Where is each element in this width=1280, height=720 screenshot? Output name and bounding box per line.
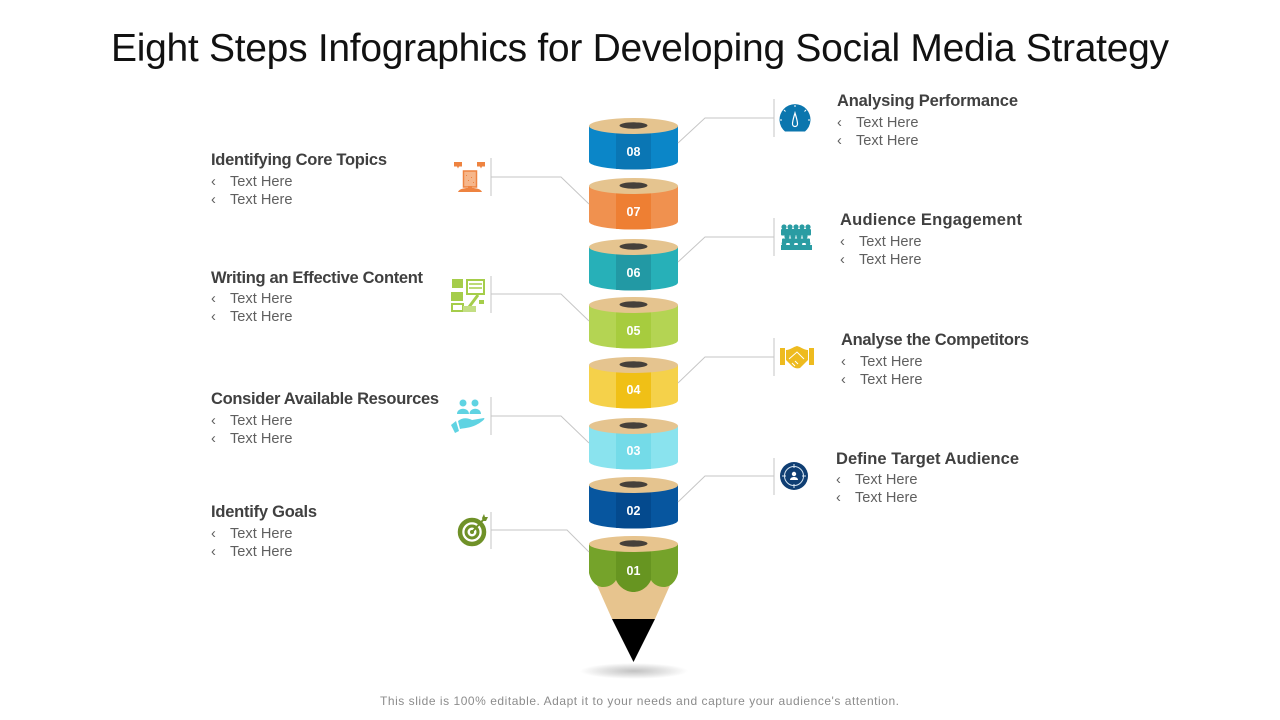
- segment 08: [589, 118, 678, 170]
- bullets: Text Here: [230, 291, 292, 307]
- heading: Define Target Audience: [836, 450, 1019, 468]
- bullets: [840, 234, 921, 268]
- bullets: ‹: [841, 354, 846, 370]
- icon: content: [451, 279, 484, 312]
- heading: Identifying Core Topics: [211, 151, 387, 169]
- segment 05: [589, 297, 678, 348]
- heading: Audience Engagement: [840, 211, 1022, 229]
- bullets: Text Here: [860, 354, 922, 370]
- bullets: ‹: [836, 490, 841, 506]
- bullets: Text Here: [230, 192, 292, 208]
- bullets: ‹: [211, 309, 216, 325]
- bullets: Text Here: [230, 309, 292, 325]
- bullets: [841, 354, 922, 388]
- icon: gauge: [779, 104, 810, 132]
- connector 06: [678, 218, 774, 262]
- icon: presentation: [454, 162, 485, 192]
- segment 01: [589, 536, 678, 592]
- connector 01: [491, 512, 589, 552]
- bullets: ‹: [211, 544, 216, 560]
- footer note: This slide is 100% editable. Adapt it to your needs and capture your audience's attention.: [380, 694, 899, 708]
- connector 02: [678, 458, 774, 502]
- heading: Consider Available Resources: [211, 390, 439, 408]
- segment 07: [589, 178, 678, 230]
- bullets: Text Here: [856, 133, 918, 149]
- bullets: ‹: [837, 115, 842, 131]
- bullets: ‹: [211, 526, 216, 542]
- step 03: Consider Available Resources: [211, 390, 589, 447]
- step 08: Analysing Performance: [678, 92, 1018, 149]
- bullets: Text Here: [230, 174, 292, 190]
- pencil shadow: [580, 663, 688, 679]
- bullets: [211, 174, 292, 208]
- bullets: Text Here: [855, 490, 917, 506]
- segment 03: 03: [627, 444, 640, 458]
- segment 03: [589, 418, 678, 470]
- heading: Identify Goals: [211, 503, 317, 521]
- bullets: ‹: [840, 252, 845, 268]
- heading: Analysing Performance: [837, 92, 1018, 110]
- icon: handshake: [780, 346, 814, 368]
- icon: target audience: [780, 462, 808, 490]
- segment 07: 07: [627, 205, 640, 219]
- heading: Analyse the Competitors: [841, 331, 1029, 349]
- bullets: ‹: [211, 174, 216, 190]
- step 07: Identifying Core Topics: [211, 151, 589, 208]
- step 01: Identify Goals: [211, 503, 589, 560]
- bullets: Text Here: [859, 252, 921, 268]
- bullets: [211, 413, 292, 447]
- pencil wood cone: [592, 574, 675, 619]
- segment 05: 05: [627, 324, 640, 338]
- icon: audience: [781, 224, 812, 250]
- step 06: Audience Engagement: [678, 211, 1022, 268]
- bullets: [211, 526, 292, 560]
- connector 04: [678, 338, 774, 383]
- title: Eight Steps Infographics for Developing Social Media Strategy: [111, 27, 1170, 70]
- bullets: [836, 472, 917, 506]
- bullets: Text Here: [230, 526, 292, 542]
- bullets: ‹: [211, 192, 216, 208]
- connector 03: [491, 397, 589, 443]
- connector 05: [491, 276, 589, 321]
- segment 06: [589, 239, 678, 290]
- bullets: Text Here: [855, 472, 917, 488]
- pencil: [580, 118, 688, 679]
- connector 08: [678, 99, 774, 143]
- bullets: Text Here: [230, 413, 292, 429]
- bullets: [837, 115, 918, 149]
- segment 06: 06: [627, 266, 640, 280]
- icon: bullseye: [460, 514, 488, 544]
- step 05: Writing an Effective Content: [211, 269, 589, 325]
- bullets: Text Here: [860, 372, 922, 388]
- segment 04: 04: [627, 383, 640, 397]
- bullets: ‹: [211, 413, 216, 429]
- segment 04: [589, 357, 678, 408]
- bullets: Text Here: [230, 544, 292, 560]
- heading: Writing an Effective Content: [211, 269, 424, 287]
- segment 01: 01: [627, 564, 640, 578]
- bullets: ‹: [211, 291, 216, 307]
- bullets: Text Here: [859, 234, 921, 250]
- bullets: ‹: [841, 372, 846, 388]
- bullets: ‹: [211, 431, 216, 447]
- bullets: ‹: [840, 234, 845, 250]
- pencil graphite tip: [612, 619, 655, 662]
- segment 08: 08: [627, 145, 640, 159]
- bullets: [211, 291, 292, 325]
- step 04: Analyse the Competitors: [678, 331, 1029, 388]
- segment 02: 02: [627, 504, 640, 518]
- bullets: Text Here: [230, 431, 292, 447]
- step 02: Define Target Audience: [678, 450, 1019, 506]
- bullets: ‹: [837, 133, 842, 149]
- connector 07: [491, 158, 589, 204]
- bullets: Text Here: [856, 115, 918, 131]
- bullets: ‹: [836, 472, 841, 488]
- segment 02: [589, 477, 678, 528]
- icon: hand with people: [451, 400, 484, 433]
